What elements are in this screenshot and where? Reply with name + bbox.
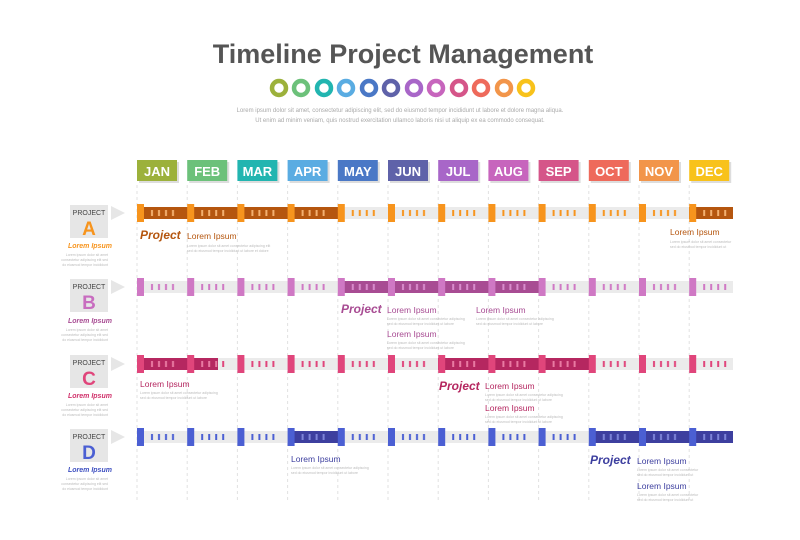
month headers: NOV bbox=[645, 164, 673, 179]
dashed grid lines bbox=[137, 185, 689, 500]
label: project C: PROJECT bbox=[73, 360, 106, 367]
notes C: Lorem Ipsum bbox=[485, 403, 535, 413]
month headers: MAY bbox=[344, 164, 372, 179]
label: project C: Lorem Ipsum bbox=[68, 393, 112, 400]
notes C bbox=[140, 379, 563, 424]
timeline bar D bbox=[137, 428, 733, 446]
label: project C: do eiusmod tempor incididunt bbox=[62, 413, 108, 417]
month headers: JUL bbox=[446, 164, 471, 179]
notes D: Lorem ipsum dolor sit amet consectetur bbox=[637, 493, 699, 497]
label: project C: consectetur adipiscing elit sed bbox=[61, 408, 108, 412]
notes C: Lorem ipsum dolor sit amet consectetur adipiscing bbox=[485, 393, 563, 397]
label: project D: Lorem Ipsum bbox=[68, 467, 112, 474]
row C bbox=[61, 355, 733, 424]
notes A bbox=[140, 227, 732, 253]
label: project D: Lorem ipsum dolor sit amet bbox=[66, 477, 108, 481]
notes C: sed do eiusmod tempor incididunt ut labore bbox=[485, 398, 552, 402]
row D bbox=[61, 428, 733, 502]
label: project A: Lorem ipsum dolor sit amet bbox=[66, 253, 108, 257]
subtitle text: Lorem ipsum dolor sit amet, consectetur adipiscing elit, sed do eiusmod tempor incididunt ut labore et dolore magna aliqua. bbox=[237, 108, 564, 114]
label: project A: Lorem Ipsum bbox=[68, 243, 112, 250]
label: project C: Lorem ipsum dolor sit amet bbox=[66, 403, 108, 407]
notes A: Project bbox=[140, 228, 182, 242]
subtitle text bbox=[237, 108, 564, 124]
notes D bbox=[291, 453, 699, 502]
label: project B: consectetur adipiscing elit sed bbox=[61, 333, 108, 337]
month headers: FEB bbox=[194, 164, 220, 179]
label: project D bbox=[61, 429, 125, 491]
notes B: Project bbox=[341, 302, 383, 316]
month headers: APR bbox=[294, 164, 322, 179]
notes B: Lorem ipsum dolor sit amet consectetur adipiscing bbox=[387, 317, 465, 321]
notes C: Lorem ipsum dolor sit amet consectetur adipiscing bbox=[485, 415, 563, 419]
notes B: Lorem Ipsum bbox=[387, 305, 437, 315]
timeline bar C bbox=[137, 355, 733, 373]
row B bbox=[61, 278, 733, 350]
notes A: Lorem ipsum dolor sit amet consectetur bbox=[670, 240, 732, 244]
notes D: Lorem Ipsum bbox=[637, 456, 687, 466]
month headers bbox=[137, 160, 731, 183]
notes D: Lorem ipsum dolor sit amet consectetur adipiscing bbox=[291, 466, 369, 470]
label: project D: PROJECT bbox=[73, 434, 106, 441]
notes D: Lorem Ipsum bbox=[637, 481, 687, 491]
notes D: Project bbox=[590, 453, 632, 467]
label: project D: consectetur adipiscing elit sed bbox=[61, 482, 108, 486]
notes C: Lorem ipsum dolor sit amet consectetur adipiscing bbox=[140, 391, 218, 395]
notes A: Lorem ipsum dolor sit amet consectetur adipiscing elit bbox=[187, 244, 270, 248]
label: project A: PROJECT bbox=[73, 210, 106, 217]
label: project B: Lorem Ipsum bbox=[68, 318, 112, 325]
label: project C bbox=[61, 355, 125, 417]
notes B: sed do eiusmod tempor incididunt ut labore bbox=[476, 322, 543, 326]
notes B: sed do eiusmod tempor incididunt ut labore bbox=[387, 346, 454, 350]
label: project A: consectetur adipiscing elit sed bbox=[61, 258, 108, 262]
notes C: sed do eiusmod tempor incididunt ut labore bbox=[140, 396, 207, 400]
timeline bar A bbox=[137, 204, 733, 222]
label: project B bbox=[61, 279, 125, 342]
notes A: sed do eiusmod tempor incididunt ut bbox=[670, 245, 726, 249]
notes D: sed do eiusmod tempor incididunt ut bbox=[637, 473, 693, 477]
notes B: Lorem ipsum dolor sit amet consectetur adipiscing bbox=[476, 317, 554, 321]
label: project B: do eiusmod tempor incididunt bbox=[62, 338, 108, 342]
label: project B: PROJECT bbox=[73, 284, 106, 291]
notes D: sed do eiusmod tempor incididunt ut bbox=[637, 498, 693, 502]
notes C: Lorem Ipsum bbox=[140, 379, 190, 389]
label: project D: D bbox=[82, 443, 96, 464]
label: project A bbox=[61, 205, 125, 267]
notes D: Lorem ipsum dolor sit amet consectetur bbox=[637, 468, 699, 472]
notes D: sed do eiusmod tempor incididunt ut labore bbox=[291, 471, 358, 475]
notes C: sed do eiusmod tempor incididunt ut labore bbox=[485, 420, 552, 424]
month headers: SEP bbox=[546, 164, 572, 179]
notes A: Lorem Ipsum bbox=[670, 227, 720, 237]
row A bbox=[61, 204, 733, 267]
notes A: sed do eiusmod tempor incididunt ut labore et dolore bbox=[187, 249, 269, 253]
label: project D: do eiusmod tempor incididunt bbox=[62, 487, 108, 491]
month headers: OCT bbox=[595, 164, 623, 179]
month headers: JAN bbox=[144, 164, 170, 179]
notes A: Lorem Ipsum bbox=[187, 231, 237, 241]
label: project C: C bbox=[82, 369, 96, 390]
notes B: sed do eiusmod tempor incididunt ut labore bbox=[387, 322, 454, 326]
month headers: JUN bbox=[395, 164, 421, 179]
label: project A: A bbox=[82, 219, 96, 240]
label: project B: B bbox=[82, 293, 96, 314]
month headers: AUG bbox=[494, 164, 523, 179]
color ring row bbox=[272, 81, 533, 95]
subtitle text: Ut enim ad minim veniam, quis nostrud exercitation ullamco laboris nisi ut aliquip ex ea commodo consequat. bbox=[255, 118, 545, 124]
notes C: Project bbox=[439, 379, 481, 393]
notes D: Lorem Ipsum bbox=[291, 454, 341, 464]
notes B: Lorem ipsum dolor sit amet consectetur adipiscing bbox=[387, 341, 465, 345]
notes C: Lorem Ipsum bbox=[485, 381, 535, 391]
month headers: DEC bbox=[695, 164, 724, 179]
month headers: MAR bbox=[243, 164, 273, 179]
notes B: Lorem Ipsum bbox=[476, 305, 526, 315]
notes B: Lorem Ipsum bbox=[387, 329, 437, 339]
title: Timeline Project Management bbox=[213, 39, 593, 69]
label: project A: do eiusmod tempor incididunt bbox=[62, 263, 108, 267]
label: project B: Lorem ipsum dolor sit amet bbox=[66, 328, 108, 332]
timeline bar B bbox=[137, 278, 733, 296]
notes B bbox=[341, 302, 554, 350]
